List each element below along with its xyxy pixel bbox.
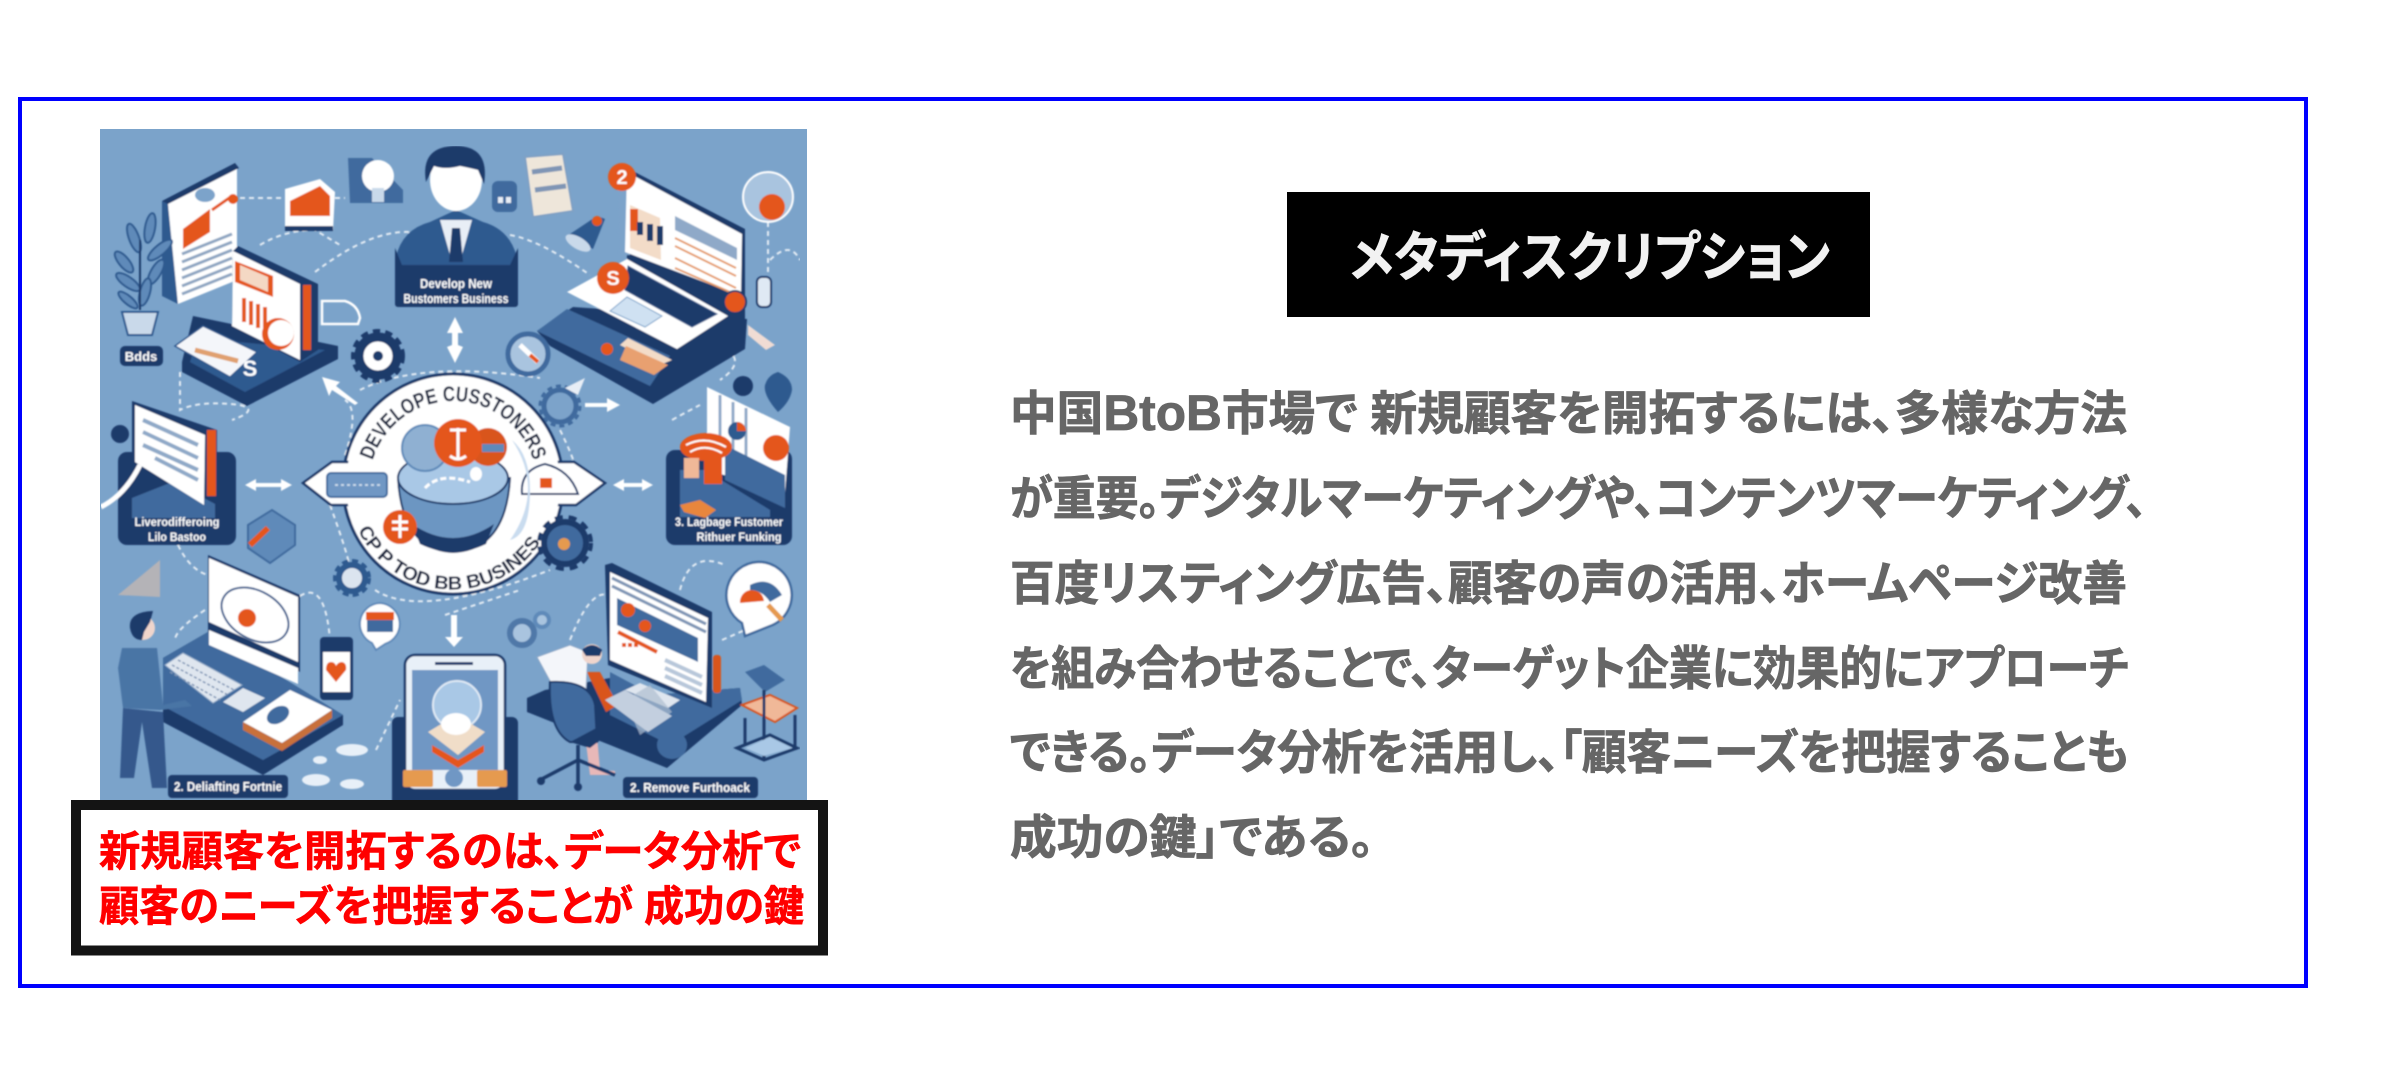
arrow: up-left to tablet bbox=[322, 377, 358, 405]
person: man at keyboard bbox=[118, 611, 192, 788]
icon: map pin bbox=[765, 372, 792, 412]
icon: clouds bbox=[302, 744, 368, 789]
centre badge: develop customers: CP P TOD BB BUSINES bbox=[359, 526, 540, 591]
arrow: up from centre bbox=[447, 317, 463, 363]
arrow: up-right bbox=[565, 378, 585, 395]
centre badge: develop customers bbox=[300, 372, 608, 596]
centre badge: develop customers: DEVELOPE CUSSTONERS bbox=[358, 386, 547, 460]
icon: megaphone bbox=[563, 216, 605, 255]
icon: speech bubble badge bbox=[360, 603, 400, 650]
icon: robot bbox=[492, 181, 517, 212]
icon: laptop with dashboard: 2 bbox=[616, 167, 628, 189]
caption line 1: 新規顧客を開拓するのは、データ分析で bbox=[99, 828, 801, 875]
icon: gear centre right bbox=[539, 517, 591, 569]
card: right business with label: 3. Lagbage Fustomer bbox=[675, 515, 783, 529]
card: right business with label bbox=[666, 387, 792, 545]
body text: を組み合わせることで、ターゲット企業に効果的にアプローチ bbox=[1010, 642, 2129, 695]
heading: meta description: メタディスクリプション bbox=[1350, 228, 1830, 288]
caption box bbox=[76, 805, 823, 950]
person: business man with label: Bustomers Business bbox=[404, 292, 509, 306]
label: Deliafting Fortnie bbox=[168, 775, 288, 798]
arrow: double horizontal right bbox=[613, 479, 653, 491]
label: Deliafting Fortnie: 2. Deliafting Fortnie bbox=[174, 779, 282, 794]
icon: gears blue small bbox=[510, 613, 549, 645]
person: business man with label bbox=[395, 146, 518, 307]
icon: gauge speech bubble bbox=[726, 562, 792, 636]
label: Remove Furthoack: 2. Remove Furthoack bbox=[630, 780, 751, 795]
body text bbox=[1010, 385, 2147, 864]
illustration artwork bbox=[101, 146, 800, 800]
arrow: right from gear bbox=[585, 398, 620, 412]
person: business man with label: Develop New bbox=[420, 277, 492, 291]
icon: tablet report and invoice on base bbox=[175, 246, 360, 406]
icon: orange bubble bbox=[743, 172, 793, 222]
icon: gear centre left bbox=[335, 561, 369, 595]
label: Bdds: Bdds bbox=[125, 349, 157, 364]
icon: gear blue bbox=[540, 386, 580, 426]
card: left clipboard with label: Lilo Bastoo bbox=[148, 530, 206, 544]
card: left clipboard with label bbox=[101, 401, 236, 545]
workstation: left monitor and desk bbox=[163, 555, 343, 775]
icon: report document bbox=[162, 163, 239, 304]
icon: gear left bbox=[354, 332, 402, 380]
body text: できる。データ分析を活用し、「顧客ニーズを把握することも bbox=[1010, 726, 2129, 779]
icon: side table bbox=[737, 665, 797, 760]
person: woman on chair bbox=[537, 644, 672, 791]
icon: light bulb bbox=[348, 158, 403, 203]
icon: hand bbox=[748, 325, 775, 350]
arrow: down from centre bbox=[445, 615, 463, 647]
body text: 百度リスティング広告、顧客の声の活用、ホームページ改善 bbox=[1010, 557, 2127, 610]
heading: meta description bbox=[1287, 192, 1870, 317]
device: centre phone bbox=[392, 655, 518, 807]
caption line 2: 顧客のニーズを把握することが 成功の鍵 bbox=[99, 883, 804, 930]
icon: orange house bbox=[285, 179, 335, 231]
icon: calendar document bbox=[525, 154, 573, 217]
card: right business with label: Rithuer Funking bbox=[696, 530, 782, 544]
icon: tablet report and invoice on base: S bbox=[243, 356, 257, 381]
body text: 中国BtoB市場で 新規顧客を開拓するには、多様な方法 bbox=[1010, 385, 2127, 441]
workstation: right monitor and desk bbox=[527, 563, 742, 768]
icon: wrench badge bbox=[508, 334, 548, 374]
illustration: developing new B2B customers bbox=[100, 129, 807, 800]
icon: phone with heart bbox=[320, 637, 353, 700]
panel: blue frame bbox=[20, 99, 2306, 986]
label: Remove Furthoack bbox=[623, 777, 758, 798]
label: Bdds bbox=[120, 346, 163, 366]
illustration background bbox=[100, 129, 807, 800]
chart: small bar chart bbox=[118, 560, 160, 597]
icon: cube bbox=[248, 510, 295, 563]
icon: number one badge bbox=[733, 376, 753, 396]
body text: 成功の鍵」である。 bbox=[1010, 811, 1374, 864]
arrow: double horizontal left bbox=[245, 479, 292, 491]
icon: laptop with dashboard: S bbox=[606, 268, 620, 290]
icon: pendant tag bbox=[757, 277, 771, 307]
icon: laptop with dashboard bbox=[537, 163, 747, 404]
icon: potted plant bbox=[112, 212, 175, 335]
card: left clipboard with label: Liverodifferoing bbox=[134, 515, 220, 529]
body text: が重要。デジタルマーケティングや、コンテンツマーケティング、 bbox=[1010, 472, 2147, 525]
